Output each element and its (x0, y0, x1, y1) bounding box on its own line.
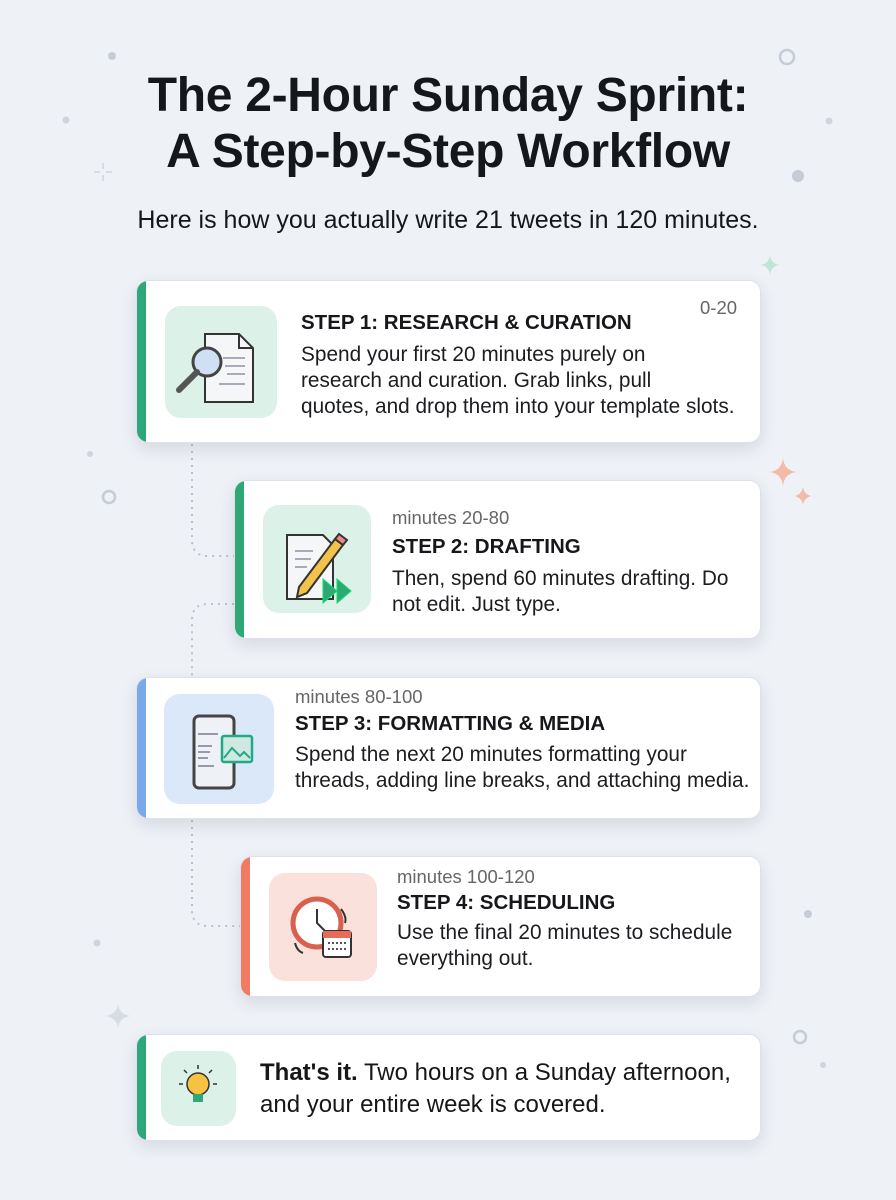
icon: clock calendar (269, 873, 377, 981)
body text: quotes, and drop them into your template slots. (301, 395, 735, 418)
title (148, 69, 748, 178)
icon: phone with image (164, 694, 274, 804)
body text: everything out. (397, 947, 533, 970)
body text (392, 567, 728, 616)
body text (397, 921, 732, 970)
callout text: and your entire week is covered. (260, 1091, 606, 1118)
body text: research and curation. Grab links, pull (301, 369, 651, 392)
heading: STEP 2: DRAFTING (392, 535, 581, 558)
body text: Use the final 20 minutes to schedule (397, 921, 732, 944)
title: The 2-Hour Sunday Sprint: (148, 69, 748, 122)
subtitle: Here is how you actually write 21 tweets in 120 minutes. (137, 206, 759, 234)
heading: STEP 1: RESEARCH & CURATION (301, 311, 632, 334)
time label: 0-20 (700, 297, 737, 318)
body text: Spend the next 20 minutes formatting your (295, 743, 687, 766)
body text (301, 343, 735, 418)
panel: conclusion callout (136, 1034, 761, 1141)
callout text: That's it. Two hours on a Sunday afternoon, (260, 1059, 731, 1086)
panel: step 3 (136, 677, 761, 819)
title: A Step-by-Step Workflow (166, 125, 730, 178)
heading: STEP 4: SCHEDULING (397, 891, 615, 914)
panel: step 4 (240, 856, 761, 997)
icon: light bulb (161, 1051, 236, 1126)
callout text (260, 1059, 731, 1118)
heading: STEP 3: FORMATTING & MEDIA (295, 712, 605, 735)
icon: pencil draft (263, 505, 371, 613)
body text: not edit. Just type. (392, 593, 561, 616)
body text: threads, adding line breaks, and attaching media. (295, 769, 749, 792)
panel: step 2 (234, 480, 761, 639)
body text: Spend your first 20 minutes purely on (301, 343, 646, 366)
panel: step 1 (136, 280, 761, 443)
time label: minutes 100-120 (397, 866, 535, 887)
body text (295, 743, 749, 792)
icon: magnifier document (165, 306, 277, 418)
time label: minutes 80-100 (295, 686, 423, 707)
time label: minutes 20-80 (392, 507, 509, 528)
body text: Then, spend 60 minutes drafting. Do (392, 567, 728, 590)
